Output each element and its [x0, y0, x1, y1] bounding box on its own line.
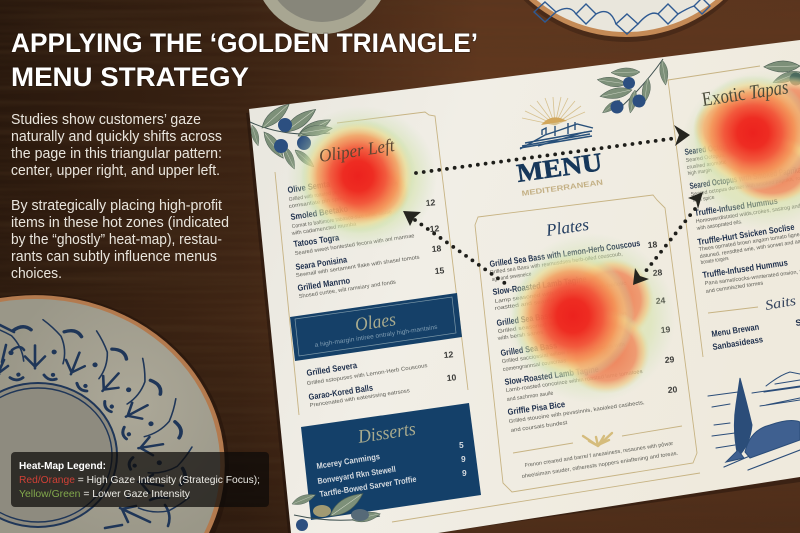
menu items: left column: Shosed curtee, wilt ramsiary and fonds	[298, 280, 397, 300]
heading: Plates: Plates	[544, 215, 590, 240]
text block: second paragraph	[11, 198, 229, 282]
menu items: right column: with spice	[691, 195, 715, 204]
panel: Disserts: Disserts	[356, 419, 417, 448]
icon: olive sprig bottom left	[291, 490, 381, 531]
menu items: under banner	[306, 349, 457, 409]
footer note	[521, 441, 679, 480]
ceramic cup top	[254, 0, 390, 34]
patterned plate top right	[480, 0, 772, 42]
menu items: right column: Seared Octopus,	[685, 152, 726, 164]
menu items: Plates: and coursais bundest	[510, 420, 568, 434]
subtitle: MEDITERRANEAN: MEDITERRANEAN	[521, 178, 603, 198]
section: Saits: Saits	[764, 294, 798, 314]
panel: Disserts: Bonveyard Rkn Stewell	[317, 464, 396, 486]
panel: Olaes banner: Olaes	[354, 309, 397, 336]
menu items: left column: Sewnall with sertament flake with shasel tomots	[295, 255, 420, 279]
menu items: left column: 12	[425, 197, 436, 208]
menu items: Plates: ags and sewsneice	[491, 271, 532, 283]
heat map: centre hot zone	[505, 233, 675, 403]
title: MENU STRATEGY	[11, 62, 249, 92]
section: Saits: Sanbasideass	[712, 334, 764, 352]
menu items: Plates: comengrannsal couscrass	[502, 358, 567, 373]
menu items: Plates: Grilled Sea Bass with Lemon-Herb Couscous	[489, 238, 641, 269]
menu items: under banner: Prencenated with eatesissing eatrsoss	[309, 388, 411, 409]
menu items: left column: Comat to baltimore tabasco-size white sause	[291, 209, 392, 230]
menu items: left column: Seara Ponisina	[295, 254, 348, 272]
text block: second paragraph: rants can subtly influence menus	[11, 249, 217, 265]
text block: intro paragraph: center, upper right, and upper left.	[11, 163, 220, 179]
text block: second paragraph: items in these hot zones (indicated	[11, 215, 229, 231]
menu items: right column	[684, 140, 800, 295]
panel: Disserts: 9	[461, 454, 466, 464]
menu items: left column: Seared sweet hontested fecora with anl marmae	[294, 233, 415, 257]
panel: Disserts: 9	[462, 468, 467, 478]
text block: second paragraph: choices.	[11, 266, 62, 282]
text block: intro paragraph: the page in this triangular pattern:	[11, 146, 222, 162]
heading: Oliper Left: Oliper Left	[318, 135, 397, 166]
footer note: oheeisiman sauder, oitherests noppers eniaftening and toreas.	[521, 451, 679, 480]
menu items: Plates: roastted and seared	[494, 298, 555, 312]
title: APPLYING THE ‘GOLDEN TRIANGLE’	[11, 28, 478, 58]
menu items: Plates: 24	[655, 295, 666, 306]
menu items: right column: and cemmiszted tarmes	[705, 280, 764, 295]
menu items: Plates: Grilled stouoine with pevssinnis, kaoiaked casibects,	[508, 400, 645, 425]
icon: olive sprig top right	[763, 59, 800, 86]
menu items: left column: 15	[434, 265, 445, 276]
menu items: Plates: Lamb-roasted concoince within roasted lame tomatoes	[505, 369, 643, 394]
panel: Olaes banner	[290, 293, 462, 361]
title: MENU: MENU	[515, 147, 604, 188]
menu items: under banner: 12	[443, 349, 454, 360]
menu items: Plates: Lamp seasoned with chermoula, tartar, bellolic	[494, 280, 627, 305]
menu items: right column: Thees opmsted broen angam tomato ligne	[698, 232, 800, 253]
menu items: under banner: Garao-Kored Balls	[308, 382, 374, 402]
menu items: left column: with cadamencted mumba	[290, 221, 357, 237]
menu sheet	[246, 40, 800, 533]
legend: Heat-Map Legend:	[19, 461, 106, 472]
menu items: right column: datuned, rensdted wrie, with sorwet and aa	[699, 239, 800, 260]
panel: Plates frame	[392, 195, 700, 522]
icon: olive sprig top left	[250, 101, 333, 171]
menu items: right column: Pana samst/cocks-wnnterated onsion, t	[705, 269, 800, 287]
menu items: left column: Grilled Manrno	[297, 275, 351, 293]
legend	[11, 452, 269, 507]
patterned plate bottom left	[0, 294, 229, 533]
menu items: under banner: Grilled sstopuses with Lemon-Herb Couscous	[306, 363, 428, 387]
menu items: Plates: 18	[647, 239, 658, 250]
ornament: gold wheat	[513, 426, 682, 453]
panel: Disserts: Tartfle-Bowed Sarver Troffie	[319, 474, 417, 499]
text block: intro paragraph	[11, 112, 222, 179]
panel: Disserts: Mcerey Canmings	[316, 451, 381, 471]
menu items: Plates: Slow-Roasted Lamb Tagine	[492, 274, 587, 297]
menu items: left column: Grilled with roasted peppers and preserved lemon	[288, 181, 398, 203]
arrow: centre to upper left	[403, 211, 506, 284]
menu items: left column	[287, 179, 445, 300]
menu items: right column: with aasoprated eils.	[695, 219, 743, 232]
text block: second paragraph: By strategically placing high-profit	[11, 198, 222, 214]
logo: sun and village	[520, 97, 593, 149]
title	[11, 28, 478, 92]
text block: intro paragraph: naturally and quickly shifts across	[11, 129, 222, 145]
arrow: upper right to centre	[633, 192, 703, 285]
legend: Yellow/Green = Lower Gaze Intensity	[19, 489, 191, 500]
section: Saits	[708, 294, 800, 352]
menu items: Plates	[489, 238, 678, 434]
menu items: under banner: Grilled Severa	[306, 360, 358, 378]
menu items: under banner: 10	[446, 372, 457, 383]
menu items: right column: bonate torgers	[700, 256, 729, 266]
menu items: left column: Tatoos Togra	[293, 232, 340, 249]
menu items: Plates: Grilled seasoned with fennel herb and lemon	[497, 311, 627, 335]
menu items: Plates: with bersh sanes	[496, 330, 544, 342]
illustration: coastal landscape	[708, 372, 800, 470]
arrow: upper left to upper right	[416, 125, 690, 173]
legend: Red/Orange = High Gaze Intensity (Strategic Focus);	[19, 475, 260, 486]
menu items: Plates: 28	[652, 267, 663, 278]
heading: Exotic Tapas: Exotic Tapas	[700, 76, 790, 111]
menu items: Plates: Grilled Sea Bass	[496, 310, 553, 328]
panel: Disserts	[301, 403, 481, 520]
text block: second paragraph: by the “ghostly” heat-map), restau-	[11, 232, 222, 248]
heat map: upper left hot zone	[287, 106, 437, 250]
menu items: Plates: Grilled Sea Bass	[500, 340, 558, 358]
panel: Disserts: 5	[459, 440, 464, 450]
panel: left column frame	[275, 112, 468, 415]
menu items: right column: crushed aromatic	[686, 159, 727, 171]
menu items: Plates: Grilled sacciossiat willow smoked couscous with	[501, 342, 625, 365]
menu items: right column: Truffle-Infused Hummus	[694, 196, 778, 218]
menu items: Plates: Grilled sea Bass with resmusdses herb-oiled couscoub,	[489, 251, 623, 276]
menu items: Plates: Griffle Pisa Bice	[507, 399, 566, 417]
menu items: left column: Smoled Beetako	[290, 203, 349, 222]
section: Saits: Menu Brewan	[711, 322, 760, 339]
panel: Olaes banner: a high-margin intiree ontraly high-mantains	[314, 324, 438, 349]
menu items: right column: Homowerdistated wilds,crokes, sastrog and	[695, 203, 800, 225]
menu items: right column: Seared Octopus	[684, 140, 735, 157]
panel: right column frame	[668, 66, 760, 357]
icon: olive sprig top centre	[597, 59, 668, 115]
menu items: left column: comsanfate pin spiced almonds	[288, 191, 375, 210]
menu items: Plates: and sachmon asuile	[506, 390, 554, 403]
menu items: Plates: 20	[667, 384, 678, 395]
menu items: Plates: 29	[664, 354, 675, 365]
menu items: Plates: Slow-Roasted Lamb Tagine	[504, 364, 599, 387]
menu items: Plates: 19	[660, 324, 671, 335]
menu items: right column: high margin	[687, 168, 712, 177]
menu items: left column: 12	[429, 223, 440, 234]
text block: intro paragraph: Studies show customers’ gaze	[11, 112, 201, 128]
heat map: upper right hot zone	[680, 70, 800, 230]
footer note: Frenon creared and barrel f aneasiness, resaunes with pôwar	[524, 441, 674, 469]
menu items: left column: 18	[431, 243, 442, 254]
menu items: left column: Olive Semta	[287, 179, 331, 195]
